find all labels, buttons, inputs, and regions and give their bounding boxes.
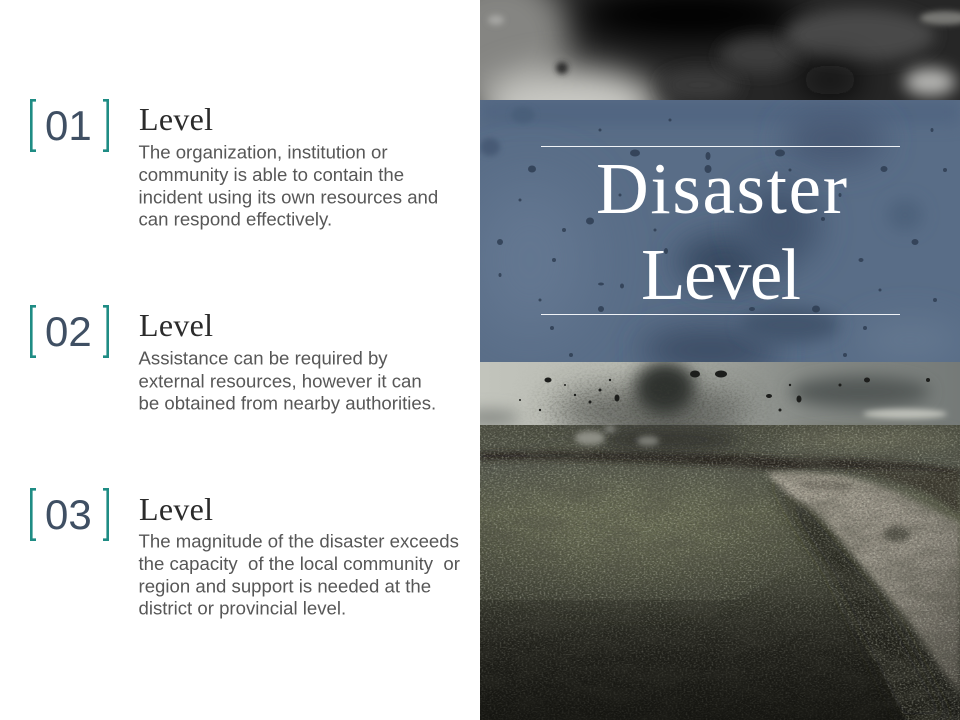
level 03 heading: Level [139,491,213,527]
level 01 block [31,100,438,230]
level 01 description: community is able to contain the [138,164,404,185]
level 03 description: district or provincial level. [138,598,346,618]
title text: Disaster [596,148,847,229]
level 02 block [31,306,436,414]
level 01 description: incident using its own resources and [138,186,438,208]
level 03 description: region and support is needed at the [138,576,431,596]
lower field shadow [480,578,905,720]
tornado debris cloud [528,362,771,463]
photo: tornado over field and dirt road [460,362,960,720]
level 01 heading: Level [139,101,213,137]
title rule bottom [541,314,900,315]
level 03 block [31,489,460,618]
sky [480,362,960,432]
number bracket 03 [31,489,108,540]
level 02 heading: Level [139,307,213,343]
number bracket 03: 03 [45,491,92,538]
soil ridge [480,451,960,477]
level 03 description: The magnitude of the disaster exceeds [138,530,459,552]
dirt road [767,472,960,693]
number bracket 02 [31,306,108,357]
title text [596,148,847,315]
grain texture [480,425,960,720]
level 02 description: external resources, however it can [138,370,422,392]
number bracket 01 [31,100,108,151]
level 02 description: Assistance can be required by [138,348,388,368]
field [480,425,960,720]
number bracket 02: 02 [45,308,92,355]
title rule top [541,146,900,147]
left white panel [0,0,480,720]
level 03 description: the capacity of the local community or [138,553,460,574]
number bracket 01: 01 [45,102,92,149]
title band over photo [470,100,960,372]
level 01 description: The organization, institution or [138,142,388,162]
level 01 description: can respond effectively. [138,208,332,230]
dark roadside verge [770,482,913,664]
level 02 description: be obtained from nearby authorities. [138,392,436,414]
photo: storm sky top strip [480,0,960,100]
flying debris [519,370,930,412]
title text: Level [641,234,801,315]
